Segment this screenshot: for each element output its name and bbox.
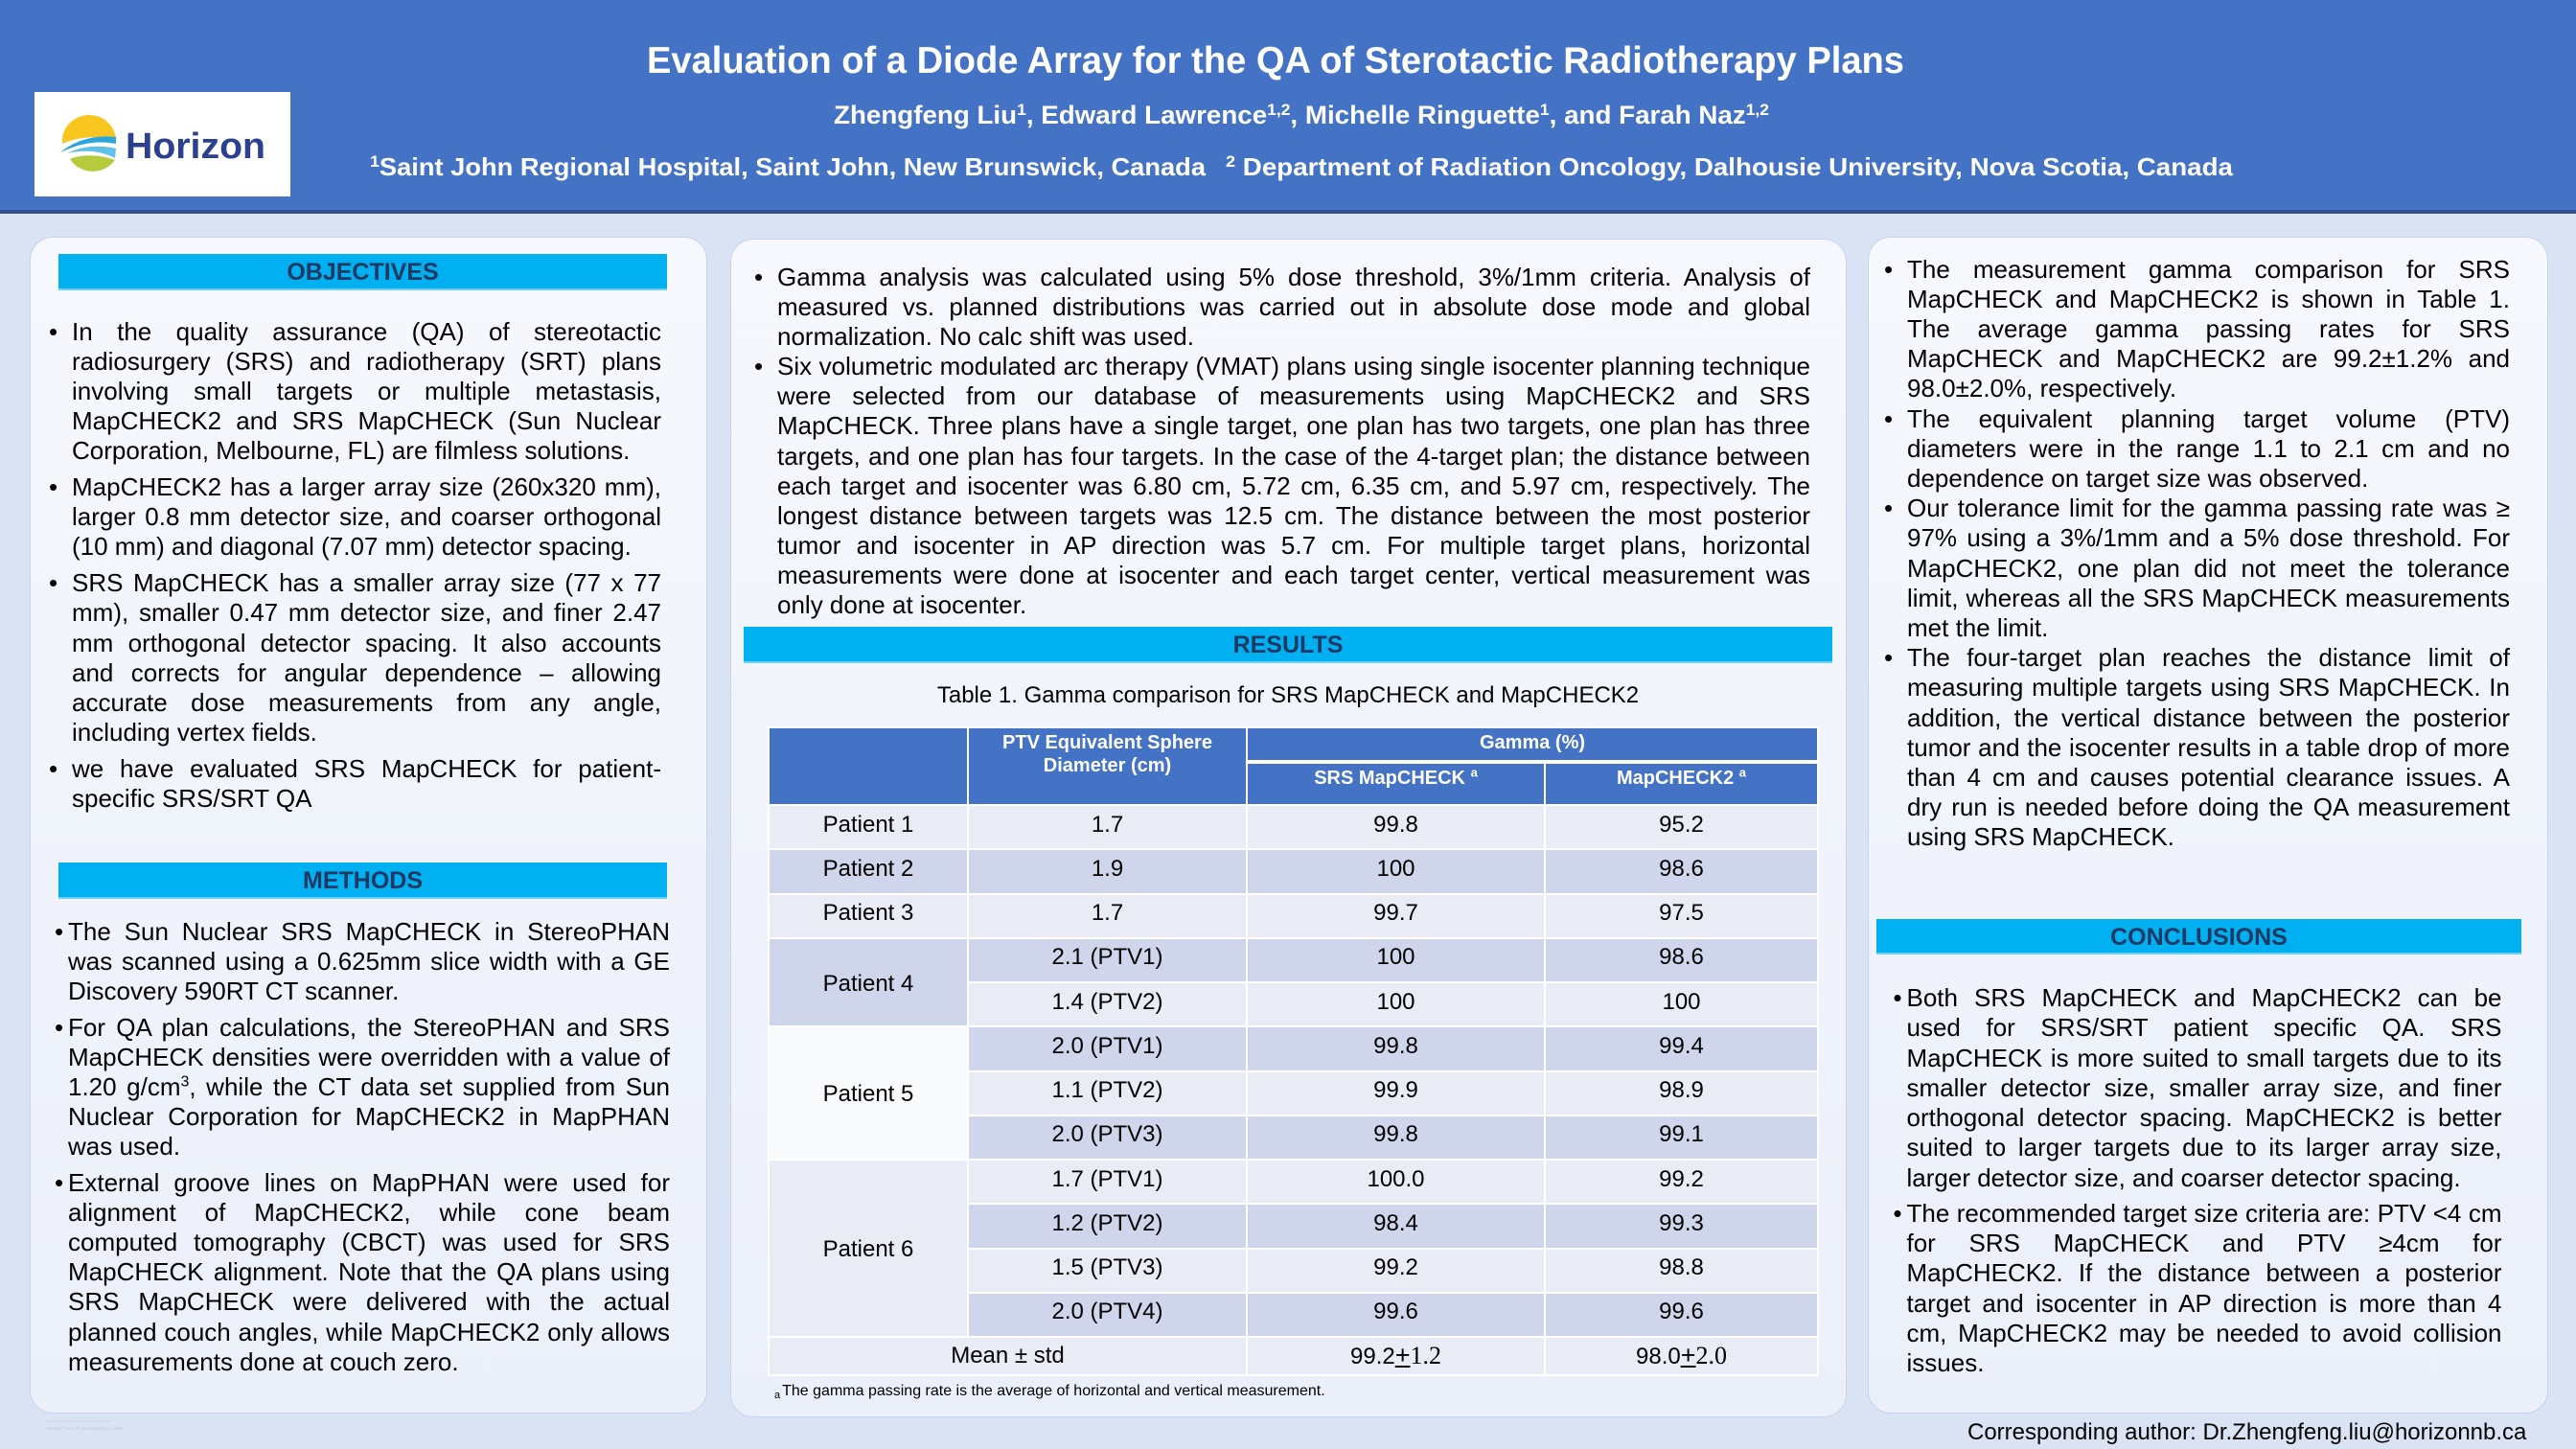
table: gamma comparison: Patient 6 bbox=[823, 1236, 913, 1262]
table: gamma comparison: 98.4 bbox=[1373, 1210, 1418, 1236]
text: gamma analysis and plan selection: were selected from our database of measurements using MapCHECK2 and SRS bbox=[777, 381, 1810, 410]
panel: gamma analysis and results bbox=[730, 239, 1847, 1417]
text: • bbox=[1894, 1199, 1902, 1228]
text: • bbox=[1884, 404, 1893, 433]
table: gamma comparison: 99.2+1.2 bbox=[1350, 1341, 1441, 1369]
text: objectives bbox=[49, 316, 661, 813]
table: gamma comparison: 1.7 bbox=[1092, 812, 1123, 838]
text: discussion: using SRS MapCHECK. bbox=[1907, 822, 2174, 851]
text: conclusions: suited to larger targets due to its larger array size, bbox=[1907, 1133, 2501, 1162]
table: gamma comparison: 100.0 bbox=[1367, 1166, 1425, 1192]
text: conclusions: smaller detector size, smaller array size, and finer bbox=[1907, 1073, 2501, 1102]
text: methods: computed tomography (CBCT) was used for SRS bbox=[68, 1228, 670, 1256]
text: discussion: 97% using a 3%/1mm and a 5% dose threshold. For bbox=[1907, 523, 2510, 552]
text: conclusions: The recommended target size criteria are: PTV <4 cm bbox=[1907, 1199, 2501, 1228]
text: methods: SRS MapCHECK were delivered with the actual bbox=[68, 1287, 670, 1316]
text: gamma analysis and plan selection: measured vs. planned distributions was carried out in absolute dose mode and global bbox=[777, 292, 1810, 321]
text: methods bbox=[55, 917, 670, 1376]
text: methods: The Sun Nuclear SRS MapCHECK in StereoPHAN bbox=[68, 917, 670, 946]
table: gamma comparison: 1.7 (PTV1) bbox=[1051, 1166, 1163, 1192]
heading: objectives bbox=[58, 254, 667, 290]
affiliation 2: Department of Radiation Oncology, Dalhousie University, Nova Scotia, Canada bbox=[1235, 152, 2234, 181]
text: objectives: mm orthogonal detector spacing. It also accounts bbox=[72, 629, 661, 657]
authors: 1,2 bbox=[1746, 101, 1769, 119]
text: discussion: measuring multiple targets using SRS MapCHECK. In bbox=[1907, 673, 2510, 702]
text: • bbox=[49, 316, 58, 345]
watermark: RESEARCH POSTER PRESENTATION DESIGN © 2015 bbox=[47, 1420, 110, 1423]
text: objectives: SRS MapCHECK has a smaller array size (77 x 77 bbox=[72, 568, 661, 597]
text: methods: Nuclear Corporation for MapCHECK2 in MapPHAN bbox=[68, 1102, 670, 1131]
text: conclusions: cm, MapCHECK2 may be needed to avoid collision bbox=[1907, 1319, 2501, 1347]
text: • bbox=[55, 917, 63, 946]
table: gamma comparison: Patient 4 bbox=[823, 970, 913, 997]
table: gamma comparison: Patient 1 bbox=[823, 812, 913, 838]
table: gamma comparison: 99.8 bbox=[1373, 1121, 1418, 1147]
text: discussion: tumor and the isocenter results in a table drop of more bbox=[1907, 733, 2510, 762]
table: gamma comparison: 99.6 bbox=[1373, 1299, 1418, 1324]
text: • bbox=[1884, 255, 1893, 284]
logo: Horizon bbox=[34, 92, 290, 196]
table: gamma comparison: 2.0 (PTV4) bbox=[1051, 1299, 1163, 1324]
text: gamma analysis and plan selection: only done at isocenter. bbox=[777, 590, 1026, 619]
table: gamma comparison: 99.7 bbox=[1373, 900, 1418, 926]
table: gamma comparison: Diameter (cm) bbox=[1044, 755, 1171, 776]
text: • bbox=[55, 1013, 63, 1042]
table: gamma comparison: Gamma (%) bbox=[1480, 732, 1585, 753]
text: conclusions: for SRS MapCHECK and PTV ≥4cm for bbox=[1907, 1229, 2501, 1257]
text: discussion: The four-target plan reaches the distance limit of bbox=[1907, 643, 2510, 672]
heading: methods: METHODS bbox=[303, 867, 423, 894]
text: objectives: including vertex fields. bbox=[72, 718, 317, 747]
text: methods: was scanned using a 0.625mm slice width with a GE bbox=[68, 947, 670, 976]
corresponding author: Corresponding author: Dr.Zhengfeng.liu@horizonnb.ca bbox=[1967, 1419, 2526, 1445]
table: gamma comparison: 2.1 (PTV1) bbox=[1051, 944, 1163, 970]
affiliation 2: 2 bbox=[1226, 152, 1235, 171]
text: discussion: 98.0±2.0%, respectively. bbox=[1907, 374, 2176, 402]
text: discussion: than 4 cm and causes potential clearance issues. A bbox=[1907, 763, 2510, 792]
table: gamma comparison: Patient 2 bbox=[823, 856, 913, 882]
table: gamma comparison: 100 bbox=[1662, 989, 1701, 1015]
table: gamma comparison: 100 bbox=[1376, 989, 1415, 1015]
text: objectives: radiosurgery (SRS) and radiotherapy (SRT) plans bbox=[72, 347, 661, 376]
text: discussion: MapCHECK and MapCHECK2 is shown in Table 1. bbox=[1907, 285, 2510, 313]
authors: 1,2 bbox=[1267, 101, 1290, 119]
text: discussion: met the limit. bbox=[1907, 613, 2048, 642]
text: gamma analysis and plan selection: measurements were done at isocenter and each target center, vertical measurement was bbox=[777, 561, 1810, 589]
watermark: www.PosterPresentations.com bbox=[47, 1426, 123, 1432]
text: gamma analysis and plan selection: tumor and isocenter in AP direction was 5.7 cm. For multiple target plans, horizontal bbox=[777, 531, 1810, 560]
text: methods: 1.20 g/cm3, while the CT data set supplied from Sun bbox=[68, 1072, 670, 1101]
text: objectives: (10 mm) and diagonal (7.07 mm) detector spacing. bbox=[72, 532, 632, 561]
affiliation 1: Saint John Regional Hospital, Saint John, New Brunswick, Canada bbox=[380, 152, 1207, 181]
table: gamma comparison: 95.2 bbox=[1659, 812, 1704, 838]
text: gamma analysis and plan selection: normalization. No calc shift was used. bbox=[777, 322, 1194, 351]
table: gamma comparison: Patient 3 bbox=[823, 900, 913, 926]
table: gamma comparison: 1.5 (PTV3) bbox=[1051, 1254, 1163, 1280]
text: objectives: MapCHECK2 has a larger array size (260x320 mm), bbox=[72, 472, 661, 501]
text: conclusions: orthogonal detector spacing. MapCHECK2 is better bbox=[1907, 1103, 2501, 1132]
heading: results: RESULTS bbox=[1233, 632, 1343, 658]
table: gamma comparison: 99.2 bbox=[1373, 1254, 1418, 1280]
text: discussion: dependence on target size was observed. bbox=[1907, 464, 2368, 493]
text: methods: alignment of MapCHECK2, while cone beam bbox=[68, 1198, 670, 1227]
affiliation 1: 1 bbox=[370, 152, 380, 171]
text: objectives: In the quality assurance (QA) of stereotactic bbox=[72, 316, 661, 345]
text: objectives: and corrects for angular dependence – allowing bbox=[72, 658, 661, 687]
table: gamma comparison: 99.9 bbox=[1373, 1077, 1418, 1103]
text: discussion: addition, the vertical distance between the posterior bbox=[1907, 703, 2510, 732]
text: gamma analysis and plan selection: targets, and one plan has four targets. In the case of the 4-target plan; the distance between bbox=[777, 442, 1810, 471]
text: gamma analysis and plan selection: Six volumetric modulated arc therapy (VMAT) plans using single isocenter planning technique bbox=[777, 352, 1810, 380]
text: objectives: MapCHECK2 and SRS MapCHECK (Sun Nuclear bbox=[72, 406, 661, 435]
table: gamma comparison: 98.8 bbox=[1659, 1254, 1704, 1280]
text: methods: For QA plan calculations, the StereoPHAN and SRS bbox=[68, 1013, 670, 1042]
header banner bbox=[0, 0, 2576, 214]
text: conclusions: MapCHECK2. If the distance between a posterior bbox=[1907, 1258, 2501, 1287]
table: gamma comparison: 2.0 (PTV1) bbox=[1051, 1033, 1163, 1059]
authors: , and Farah Naz bbox=[1550, 101, 1746, 129]
text: • bbox=[1884, 494, 1893, 522]
text: conclusions: target and isocenter in AP direction is more than 4 bbox=[1907, 1288, 2501, 1317]
text: discussion: The measurement gamma comparison for SRS bbox=[1907, 255, 2510, 284]
text: methods: planned couch angles, while MapCHECK2 only allows bbox=[68, 1318, 670, 1346]
table: gamma comparison: PTV Equivalent Sphere bbox=[1002, 732, 1212, 753]
text: methods: MapCHECK densities were overridden with a value of bbox=[68, 1043, 670, 1071]
panel: objectives and methods bbox=[30, 237, 707, 1414]
text: discussion: MapCHECK and MapCHECK2 are 99.2±1.2% and bbox=[1907, 344, 2510, 373]
text: objectives: mm), smaller 0.47 mm detector size, and finer 2.47 bbox=[72, 598, 661, 627]
text: conclusions: issues. bbox=[1907, 1348, 1984, 1377]
table: gamma comparison: 1.1 (PTV2) bbox=[1051, 1077, 1163, 1103]
text: discussion: Our tolerance limit for the gamma passing rate was ≥ bbox=[1907, 494, 2510, 522]
text: • bbox=[49, 568, 58, 597]
table: gamma comparison: 100 bbox=[1376, 856, 1415, 882]
table: gamma comparison: 98.6 bbox=[1659, 944, 1704, 970]
table: gamma comparison: 100 bbox=[1376, 944, 1415, 970]
table: gamma comparison: Mean ± std bbox=[951, 1342, 1065, 1368]
text: conclusions: MapCHECK is more suited to small targets due to its bbox=[1907, 1043, 2501, 1071]
text: gamma analysis and plan selection bbox=[754, 263, 1810, 619]
table: gamma comparison: 1.9 bbox=[1092, 856, 1123, 882]
authors: , Michelle Ringuette bbox=[1290, 101, 1540, 129]
text: discussion: MapCHECK2, one plan did not meet the tolerance bbox=[1907, 554, 2510, 583]
text: objectives: involving small targets or multiple metastasis, bbox=[72, 377, 661, 405]
authors: 1 bbox=[1017, 101, 1026, 119]
text: conclusions: Both SRS MapCHECK and MapCHECK2 can be bbox=[1907, 983, 2501, 1012]
table footnote: aThe gamma passing rate is the average of horizontal and vertical measurement. bbox=[774, 1383, 1325, 1401]
text: conclusions: used for SRS/SRT patient specific QA. SRS bbox=[1907, 1013, 2501, 1042]
text: discussion: limit, whereas all the SRS MapCHECK measurements bbox=[1907, 584, 2510, 612]
table: gamma comparison: 1.2 (PTV2) bbox=[1051, 1210, 1163, 1236]
table: gamma comparison: 1.4 (PTV2) bbox=[1051, 989, 1163, 1015]
heading: conclusions bbox=[1876, 919, 2521, 954]
text: • bbox=[1894, 983, 1902, 1012]
authors: 1 bbox=[1540, 101, 1550, 119]
panel: discussion and conclusions bbox=[1868, 237, 2548, 1414]
text: discussion: The average gamma passing rates for SRS bbox=[1907, 314, 2510, 343]
text: objectives: specific SRS/SRT QA bbox=[72, 784, 311, 813]
heading: results bbox=[744, 627, 1832, 663]
watermark bbox=[47, 1420, 123, 1432]
text: • bbox=[49, 754, 58, 783]
text: discussion bbox=[1884, 255, 2510, 851]
text: methods: MapCHECK alignment. Note that the QA plans using bbox=[68, 1257, 670, 1286]
table: gamma comparison bbox=[768, 726, 1819, 1376]
table: gamma comparison: 99.8 bbox=[1373, 1033, 1418, 1059]
table: gamma comparison: 99.2 bbox=[1659, 1166, 1704, 1192]
table: gamma comparison: 99.8 bbox=[1373, 812, 1418, 838]
text: gamma analysis and plan selection: Gamma analysis was calculated using 5% dose threshold, 3%/1mm criteria. Analysis of bbox=[777, 263, 1810, 291]
authors: , Edward Lawrence bbox=[1026, 101, 1267, 129]
table: gamma comparison: 2.0 (PTV3) bbox=[1051, 1121, 1163, 1147]
table: gamma comparison: SRS MapCHECK a bbox=[1314, 765, 1478, 789]
text: objectives: we have evaluated SRS MapCHECK for patient- bbox=[72, 754, 661, 783]
table: gamma comparison: 98.6 bbox=[1659, 856, 1704, 882]
text: objectives: larger 0.8 mm detector size, and coarser orthogonal bbox=[72, 502, 661, 531]
text: • bbox=[754, 352, 763, 380]
table: gamma comparison: 99.1 bbox=[1659, 1121, 1704, 1147]
table: gamma comparison: 98.9 bbox=[1659, 1077, 1704, 1103]
text: methods: measurements done at couch zero. bbox=[68, 1347, 459, 1376]
text: conclusions bbox=[1894, 983, 2501, 1377]
text: gamma analysis and plan selection: MapCHECK. Three plans have a single target, one plan has two targets, one plan has three bbox=[777, 411, 1810, 440]
table: gamma comparison: 1.7 bbox=[1092, 900, 1123, 926]
text: • bbox=[49, 472, 58, 501]
heading: objectives: OBJECTIVES bbox=[287, 259, 439, 286]
table: gamma comparison: 99.4 bbox=[1659, 1033, 1704, 1059]
table: gamma comparison: Patient 5 bbox=[823, 1081, 913, 1107]
title: Evaluation of a Diode Array for the QA of Sterotactic Radiotherapy Plans bbox=[647, 40, 1904, 81]
table: gamma comparison: MapCHECK2 a bbox=[1617, 765, 1746, 789]
text: • bbox=[754, 263, 763, 291]
text: • bbox=[55, 1168, 63, 1197]
text: objectives: Corporation, Melbourne, FL) are filmless solutions. bbox=[72, 436, 630, 465]
table caption: Table 1. Gamma comparison for SRS MapCHECK and MapCHECK2 bbox=[937, 682, 1639, 708]
table: gamma comparison: 99.3 bbox=[1659, 1210, 1704, 1236]
logo: Horizon: Horizon bbox=[126, 126, 265, 167]
table: gamma comparison: 99.6 bbox=[1659, 1299, 1704, 1324]
text: gamma analysis and plan selection: longest distance between targets was 12.5 cm. The distance between the most posterior bbox=[777, 501, 1810, 530]
text: discussion: dry run is needed before doing the QA measurement bbox=[1907, 793, 2510, 821]
table: gamma comparison: 97.5 bbox=[1659, 900, 1704, 926]
text: objectives: accurate dose measurements from any angle, bbox=[72, 688, 661, 717]
text: methods: Discovery 590RT CT scanner. bbox=[68, 977, 399, 1005]
text: • bbox=[1884, 643, 1893, 672]
heading: methods bbox=[58, 862, 667, 899]
text: methods: External groove lines on MapPHAN were used for bbox=[68, 1168, 670, 1197]
text: conclusions: larger detector size, and coarser detector spacing. bbox=[1907, 1163, 2461, 1192]
text: discussion: diameters were in the range 1.1 to 2.1 cm and no bbox=[1907, 434, 2510, 463]
text: gamma analysis and plan selection: each target and isocenter was 6.80 cm, 5.72 cm, 6.35 cm, and 5.97 cm, respectively. The bbox=[777, 472, 1810, 500]
text: discussion: The equivalent planning target volume (PTV) bbox=[1907, 404, 2510, 433]
authors: Zhengfeng Liu bbox=[834, 101, 1012, 129]
text: methods: was used. bbox=[68, 1132, 180, 1161]
heading: conclusions: CONCLUSIONS bbox=[2110, 924, 2288, 951]
table: gamma comparison: 98.0+2.0 bbox=[1636, 1341, 1727, 1369]
